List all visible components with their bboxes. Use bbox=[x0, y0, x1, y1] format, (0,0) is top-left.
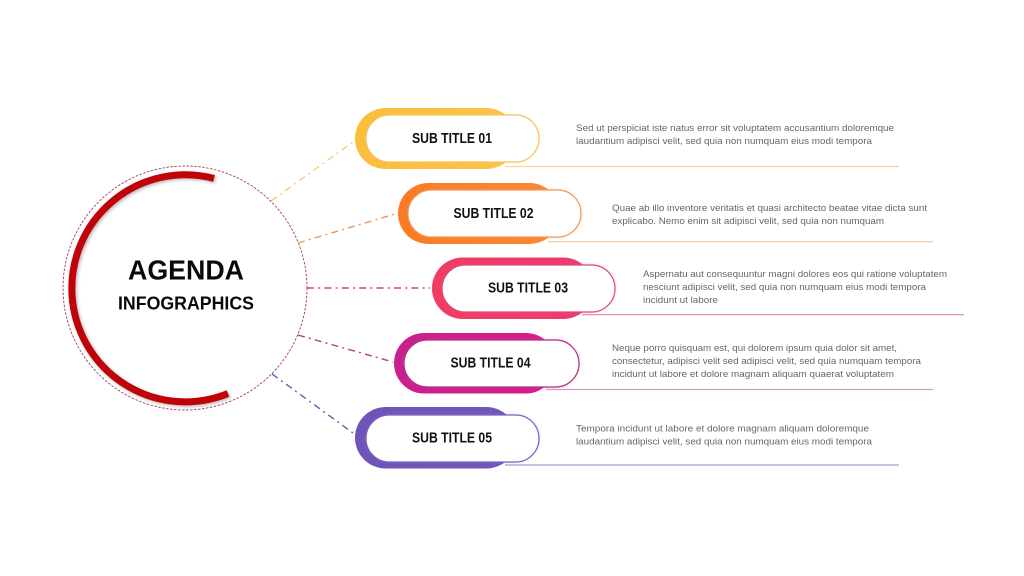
description 01: laudantium adipisci velit, sed quia non numquam eius modi tempora bbox=[576, 136, 873, 146]
pill glow 01 bbox=[366, 115, 539, 162]
front pill 05 bbox=[366, 415, 539, 462]
connector 01 bbox=[271, 142, 353, 201]
underline 05 bbox=[505, 464, 899, 466]
description 03: Aspernatu aut consequuntur magni dolores eos qui ratione voluptatem bbox=[643, 269, 947, 279]
pill label 01: SUB TITLE 01 bbox=[412, 131, 492, 147]
front pill 03 bbox=[442, 265, 615, 312]
connector 04 bbox=[298, 335, 393, 362]
pill glow 02 bbox=[408, 190, 581, 237]
backing pill 05 bbox=[355, 407, 517, 468]
underline 04 bbox=[546, 388, 933, 390]
pill glow 04 bbox=[404, 340, 579, 387]
description 05: laudantium adipisci velit, sed quia non numquam eius modi tempora bbox=[576, 436, 873, 446]
connector 02 bbox=[298, 214, 395, 243]
backing pill 01 bbox=[355, 108, 517, 169]
row 05 bbox=[355, 407, 899, 468]
description 04: Neque porro quisquam est, qui dolorem ipsum quia dolor sit amet, bbox=[612, 343, 897, 353]
description 01 bbox=[576, 123, 894, 146]
row 04 bbox=[394, 333, 933, 394]
underline 03 bbox=[582, 314, 964, 316]
agenda heading: AGENDA bbox=[128, 254, 244, 286]
description 04 bbox=[612, 343, 922, 379]
backing pill 03 bbox=[432, 258, 594, 319]
pill glow 03 bbox=[442, 265, 615, 312]
front pill 04 bbox=[404, 340, 579, 387]
dashed outer ring bbox=[63, 166, 307, 410]
description 05: Tempora incidunt ut labore et dolore magnam aliquam doloremque bbox=[576, 424, 869, 434]
pill label 03: SUB TITLE 03 bbox=[488, 280, 568, 296]
row 03 bbox=[432, 258, 964, 319]
pill label 05: SUB TITLE 05 bbox=[412, 430, 492, 446]
connector 03 bbox=[307, 287, 430, 289]
backing pill 02 bbox=[398, 183, 560, 244]
description 02: Quae ab illo inventore veritatis et quasi architecto beatae vitae dicta sunt bbox=[612, 203, 927, 213]
connector 05 bbox=[272, 374, 353, 433]
backing pill 04 bbox=[394, 333, 556, 394]
red arc bbox=[72, 175, 228, 402]
description 04: consectetur, adipisci velit sed adipisci velit, sed quia numquam tempora bbox=[612, 356, 922, 366]
pill label 04: SUB TITLE 04 bbox=[450, 356, 530, 372]
underline 01 bbox=[505, 166, 899, 168]
row 01 bbox=[355, 108, 899, 169]
description 04: incidunt ut labore et dolore magnam aliquam quaerat voluptatem bbox=[612, 369, 894, 379]
description 02: explicabo. Nemo enim sit adipisci velit, sed quia non numquam bbox=[612, 216, 884, 226]
underline 02 bbox=[548, 241, 933, 243]
front pill 02 bbox=[408, 190, 581, 237]
description 03: nesciunt adipisci velit, sed quia non numquam eius modi tempora bbox=[643, 282, 927, 292]
description 05 bbox=[576, 424, 873, 446]
row 02 bbox=[398, 183, 933, 244]
central agenda circle bbox=[63, 166, 307, 410]
description 03 bbox=[643, 269, 947, 305]
infographics subheading: INFOGRAPHICS bbox=[118, 292, 254, 314]
description 01: Sed ut perspiciat iste natus error sit voluptatem accusantium doloremque bbox=[576, 123, 894, 133]
description 02 bbox=[612, 203, 927, 226]
pill label 02: SUB TITLE 02 bbox=[454, 206, 534, 222]
pill glow 05 bbox=[366, 415, 539, 462]
front pill 01 bbox=[366, 115, 539, 162]
red arc shadow bbox=[73, 176, 229, 403]
description 03: incidunt ut labore bbox=[643, 295, 718, 305]
